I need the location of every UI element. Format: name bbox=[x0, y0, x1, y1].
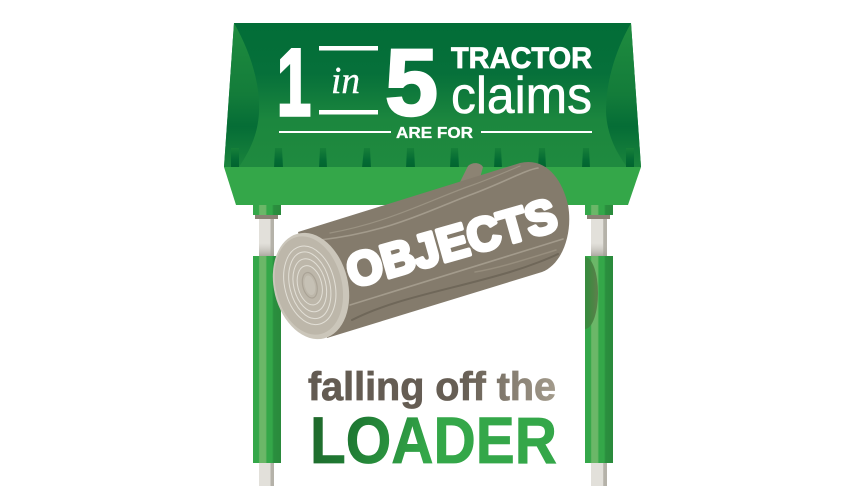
word: in: in bbox=[331, 60, 360, 102]
bark grain bbox=[320, 166, 563, 320]
log branch stub bbox=[460, 163, 483, 182]
log bbox=[262, 162, 569, 347]
log body bbox=[298, 162, 569, 338]
bucket interior bbox=[224, 23, 641, 167]
word: claims: claims bbox=[451, 67, 592, 125]
caption: falling off the: falling off the bbox=[308, 365, 556, 409]
word: are for: ARE FOR bbox=[396, 125, 473, 142]
are for line right bbox=[481, 131, 592, 133]
bucket left side bbox=[224, 23, 259, 167]
word: objects: OBJECTS bbox=[340, 188, 563, 298]
bucket right side bbox=[606, 23, 641, 167]
log cut end bbox=[262, 225, 360, 347]
number 5: 5 bbox=[385, 30, 438, 136]
are for line left bbox=[279, 131, 391, 133]
left hydraulic arm bbox=[253, 205, 281, 486]
in lines bbox=[319, 46, 378, 114]
bucket teeth bbox=[231, 148, 634, 168]
bucket lip bbox=[224, 167, 641, 205]
headline: 1 in 5 tractor claims are for bbox=[277, 30, 592, 142]
loader bucket bbox=[224, 23, 641, 205]
infographic bbox=[224, 23, 641, 486]
number 1: 1 bbox=[277, 30, 311, 136]
right hydraulic arm bbox=[585, 205, 613, 486]
caption: loader: LOADER bbox=[310, 403, 557, 477]
word: TRACTOR: TRACTOR bbox=[451, 42, 592, 75]
